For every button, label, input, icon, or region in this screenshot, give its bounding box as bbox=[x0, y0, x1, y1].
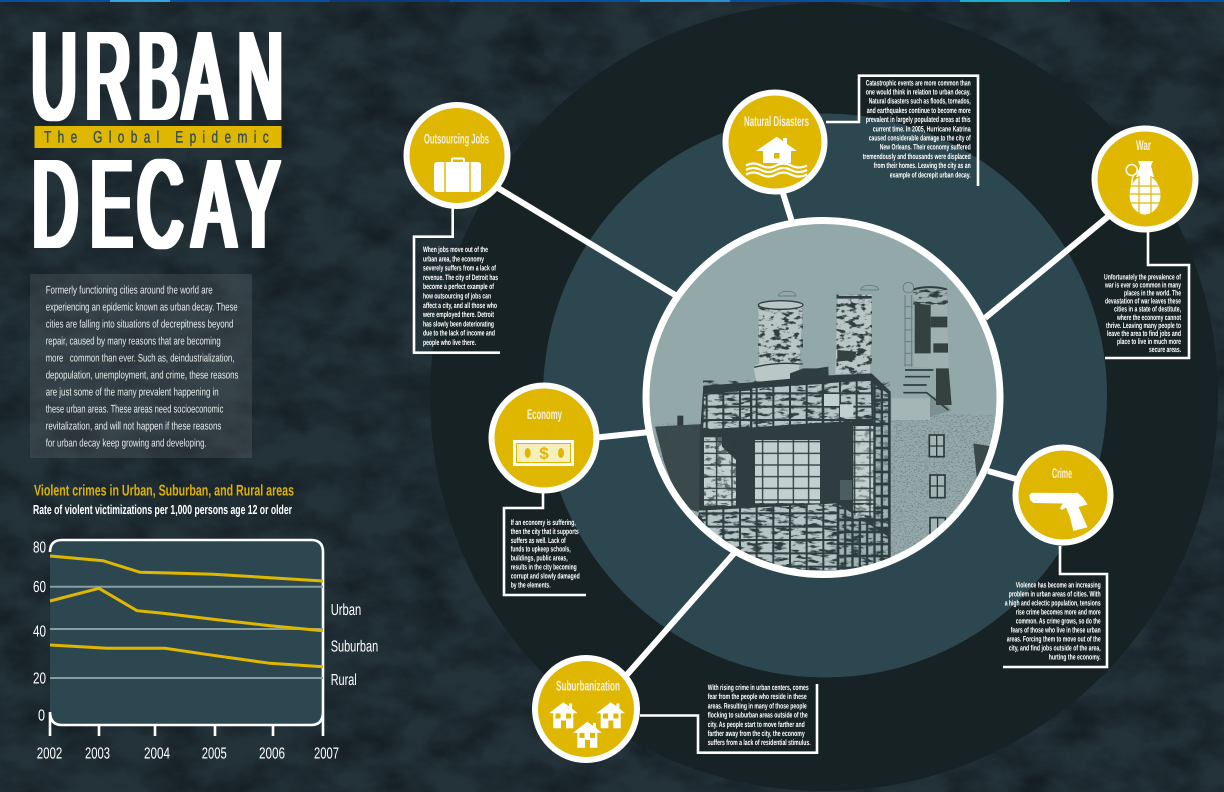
text: economy: funds to upkeep schools, bbox=[511, 545, 571, 554]
left low building bbox=[655, 416, 703, 514]
x axis labels: 2007 bbox=[314, 745, 339, 762]
text: war: war is ever so common in many bbox=[1104, 280, 1181, 289]
text: economy bbox=[511, 518, 580, 589]
panel: introduction: repair, caused by many reasons that are becoming bbox=[46, 336, 221, 348]
text: suburbanization: areas. Resulting in many of those people bbox=[708, 701, 807, 710]
smokestack 1 bbox=[753, 291, 829, 383]
text: outsourcing jobs: revenue. The city of Detroit has bbox=[423, 273, 498, 282]
text: suburbanization: With rising crime in urban centers, comes bbox=[708, 683, 809, 692]
node: outsourcing jobs: Outsourcing Jobs bbox=[424, 130, 489, 146]
outer dark circle bbox=[430, 3, 1218, 791]
text: economy: then the city that it supports bbox=[511, 527, 579, 536]
x axis labels: 2005 bbox=[202, 745, 227, 762]
text: suburbanization: city. As people start to move farther and bbox=[708, 720, 805, 729]
text: economy: suffers as well. Lack of bbox=[511, 536, 566, 545]
text: natural disasters: and earthquakes continue to become more bbox=[867, 106, 971, 115]
node: economy: Economy bbox=[527, 406, 562, 422]
text: natural disasters: one would think in relation to urban decay. bbox=[866, 88, 971, 96]
panel: introduction: are just some of the many prevalent happening in bbox=[46, 386, 219, 398]
text: crime: rise crime becomes more and more bbox=[1016, 608, 1101, 617]
panel: introduction: Formerly functioning cities around the world are bbox=[46, 284, 213, 296]
node: outsourcing jobs bbox=[406, 105, 508, 353]
line chart: violent crimes bbox=[33, 539, 378, 762]
text: natural disasters: prevalent in largely populated areas at this bbox=[866, 115, 971, 124]
panel: introduction: for urban decay keep growing and developing. bbox=[46, 438, 207, 450]
smokestack 3 bbox=[903, 282, 952, 405]
node: suburbanization: Suburbanization bbox=[556, 678, 620, 694]
panel: introduction: more common than ever. Such as, deindustrialization, bbox=[46, 352, 234, 364]
text: crime: fears of those who live in these urban bbox=[1011, 626, 1101, 634]
text: natural disasters: caused considerable damage to the city of bbox=[869, 134, 971, 142]
title: decay: DECAY bbox=[32, 135, 279, 274]
node: economy bbox=[492, 386, 596, 595]
text: natural disasters: current time. In 2005, Hurricane Katrina bbox=[873, 124, 971, 133]
text: war bbox=[1104, 272, 1181, 354]
text: outsourcing jobs: has slowly been deteriorating bbox=[423, 319, 494, 328]
y axis labels: 0 bbox=[38, 708, 45, 725]
text: crime bbox=[1005, 581, 1101, 661]
text: outsourcing jobs: become a perfect example of bbox=[423, 282, 494, 291]
text: economy: If an economy is suffering, bbox=[511, 518, 576, 527]
text: suburbanization: flocking to suburban areas outside of the bbox=[708, 711, 808, 720]
node: suburbanization bbox=[535, 658, 817, 760]
text: natural disasters: New Orleans. Their economy suffered bbox=[880, 143, 971, 152]
text: war: Unfortunately the prevalence of bbox=[1104, 272, 1181, 281]
central tower: middle windows bbox=[703, 426, 889, 527]
icon: house left bbox=[549, 702, 578, 728]
text: war: leave the area to find jobs and bbox=[1107, 329, 1181, 338]
text: war: where the economy cannot bbox=[1116, 313, 1181, 322]
central tower: lower windows bbox=[698, 503, 888, 570]
hub photo: factory smokestacks bbox=[650, 224, 996, 571]
central tower: dark mass bbox=[698, 373, 891, 570]
y axis labels: 80 bbox=[33, 539, 46, 556]
text: war: cities in a state of destitute, bbox=[1114, 305, 1181, 314]
text: crime: city, and find jobs outside of the area, bbox=[1009, 643, 1101, 652]
node: war bbox=[1094, 128, 1196, 358]
text: outsourcing jobs bbox=[422, 245, 498, 347]
panel: introduction: revitalization, and will not happen if these reasons bbox=[46, 420, 222, 432]
x axis labels: 2006 bbox=[259, 745, 285, 762]
text: war: secure areas. bbox=[1149, 345, 1181, 354]
series: suburban bbox=[50, 588, 323, 631]
text: suburbanization: farther away from the city, the economy bbox=[708, 729, 805, 738]
icon: house front bbox=[573, 722, 602, 748]
text: outsourcing jobs: people who live there. bbox=[423, 338, 476, 347]
series: urban bbox=[50, 556, 323, 581]
panel: introduction: depopulation, unemployment, and crime, these reasons bbox=[46, 370, 239, 382]
text: crime: hurting the economy. bbox=[1049, 652, 1101, 661]
text: economy: by the elements. bbox=[511, 580, 551, 589]
node: crime bbox=[1003, 448, 1110, 667]
text: outsourcing jobs: urban area, the economy bbox=[423, 254, 484, 263]
x axis labels: 2003 bbox=[85, 745, 110, 762]
text: economy: corrupt and slowly damaged bbox=[511, 571, 580, 580]
series labels: Suburban bbox=[331, 639, 378, 656]
text: war: places in the world. The bbox=[1124, 288, 1181, 298]
subtitle band: The Global Epidemic bbox=[44, 128, 269, 146]
y axis labels: 60 bbox=[33, 579, 46, 596]
text: suburbanization bbox=[708, 683, 811, 747]
node: natural disasters bbox=[726, 76, 978, 192]
text: natural disasters: Catastrophic events are more common than bbox=[866, 78, 971, 87]
text: natural disasters: tremendously and thousands were displaced bbox=[863, 152, 971, 161]
inner teal circle bbox=[543, 114, 1107, 678]
icon: three houses bbox=[549, 702, 625, 748]
icon: pistol bbox=[1029, 492, 1088, 531]
y axis labels: 40 bbox=[33, 624, 46, 641]
node: war: War bbox=[1136, 137, 1151, 153]
text: crime: common. As crime grows, so do the bbox=[1016, 616, 1101, 626]
text: war: thrive. Leaving many people to bbox=[1106, 321, 1181, 330]
panel: introduction: experiencing an epidemic known as urban decay. These bbox=[46, 302, 238, 314]
title: urban: URBAN bbox=[32, 7, 283, 146]
node: crime: Crime bbox=[1052, 465, 1072, 481]
text: outsourcing jobs: were employed there. Detroit bbox=[422, 310, 494, 319]
text: crime: a high and eclectic population, tensions bbox=[1005, 599, 1101, 608]
series labels: Urban bbox=[331, 602, 361, 619]
text: economy: buildings, public areas, bbox=[511, 554, 568, 563]
icon: banknote bbox=[513, 440, 574, 466]
y axis labels bbox=[33, 539, 46, 725]
text: economy: results in the city becoming bbox=[511, 562, 577, 572]
panel: introduction bbox=[30, 274, 252, 458]
y axis labels: 20 bbox=[33, 671, 46, 688]
text: natural disasters: Natural disasters such as floods, tornados, bbox=[869, 97, 971, 106]
text: outsourcing jobs: affect a city, and all those who bbox=[423, 301, 497, 310]
roof box and stairs bbox=[892, 370, 952, 420]
text: suburbanization: fear from the people who reside in these bbox=[708, 692, 807, 701]
text: suburbanization: suffers from a lack of residential stimulus. bbox=[708, 738, 811, 747]
text: outsourcing jobs: how outsourcing of jobs can bbox=[423, 292, 491, 300]
text: natural disasters bbox=[863, 78, 971, 179]
text: outsourcing jobs: due to the lack of income and bbox=[423, 329, 495, 338]
panel: introduction: these urban areas. These areas need socioeconomic bbox=[46, 404, 224, 416]
text: outsourcing jobs: severely suffers from a lack of bbox=[423, 264, 496, 273]
text: crime: problem in urban areas of cities. With bbox=[1009, 590, 1101, 599]
top colour strip bbox=[0, 0, 1224, 2]
text: war: place to live in much more bbox=[1117, 337, 1181, 346]
smokestack 2 bbox=[835, 285, 879, 374]
text: crime: Violence has become an increasing bbox=[1016, 581, 1101, 590]
series labels: Rural bbox=[331, 672, 357, 689]
icon: house right bbox=[596, 702, 625, 728]
icon: suitcase bbox=[434, 158, 481, 192]
icon: grenade bbox=[1126, 161, 1161, 214]
series: rural bbox=[50, 645, 323, 667]
text: natural disasters: from their homes. Leaving the city as an bbox=[874, 161, 971, 170]
icon: flooded house bbox=[746, 137, 807, 176]
icon: banknote: $ bbox=[539, 444, 549, 463]
text: natural disasters: example of decrepit urban decay. bbox=[890, 170, 971, 179]
x axis labels: 2004 bbox=[144, 745, 170, 762]
node: natural disasters: Natural Disasters bbox=[744, 113, 809, 129]
right brick building bbox=[890, 414, 994, 557]
text: crime: areas. Forcing them to move out of the bbox=[1007, 634, 1101, 644]
text: war: devastation of war leaves these bbox=[1105, 297, 1181, 306]
text: outsourcing jobs: When jobs move out of the bbox=[423, 245, 488, 254]
panel: introduction: cities are falling into situations of decrepitness beyond bbox=[46, 318, 233, 330]
x axis labels bbox=[37, 745, 339, 762]
chart subheading: Rate of violent victimizations per 1,000 persons age 12 or older bbox=[33, 502, 292, 517]
central tower: upper windows bbox=[703, 381, 890, 433]
chart heading: Violent crimes in Urban, Suburban, and Rural areas bbox=[34, 483, 294, 500]
hub photo ring bbox=[646, 220, 1000, 574]
connector lines to hub bbox=[498, 188, 1110, 678]
x axis labels: 2002 bbox=[37, 745, 62, 762]
series labels bbox=[331, 602, 378, 689]
